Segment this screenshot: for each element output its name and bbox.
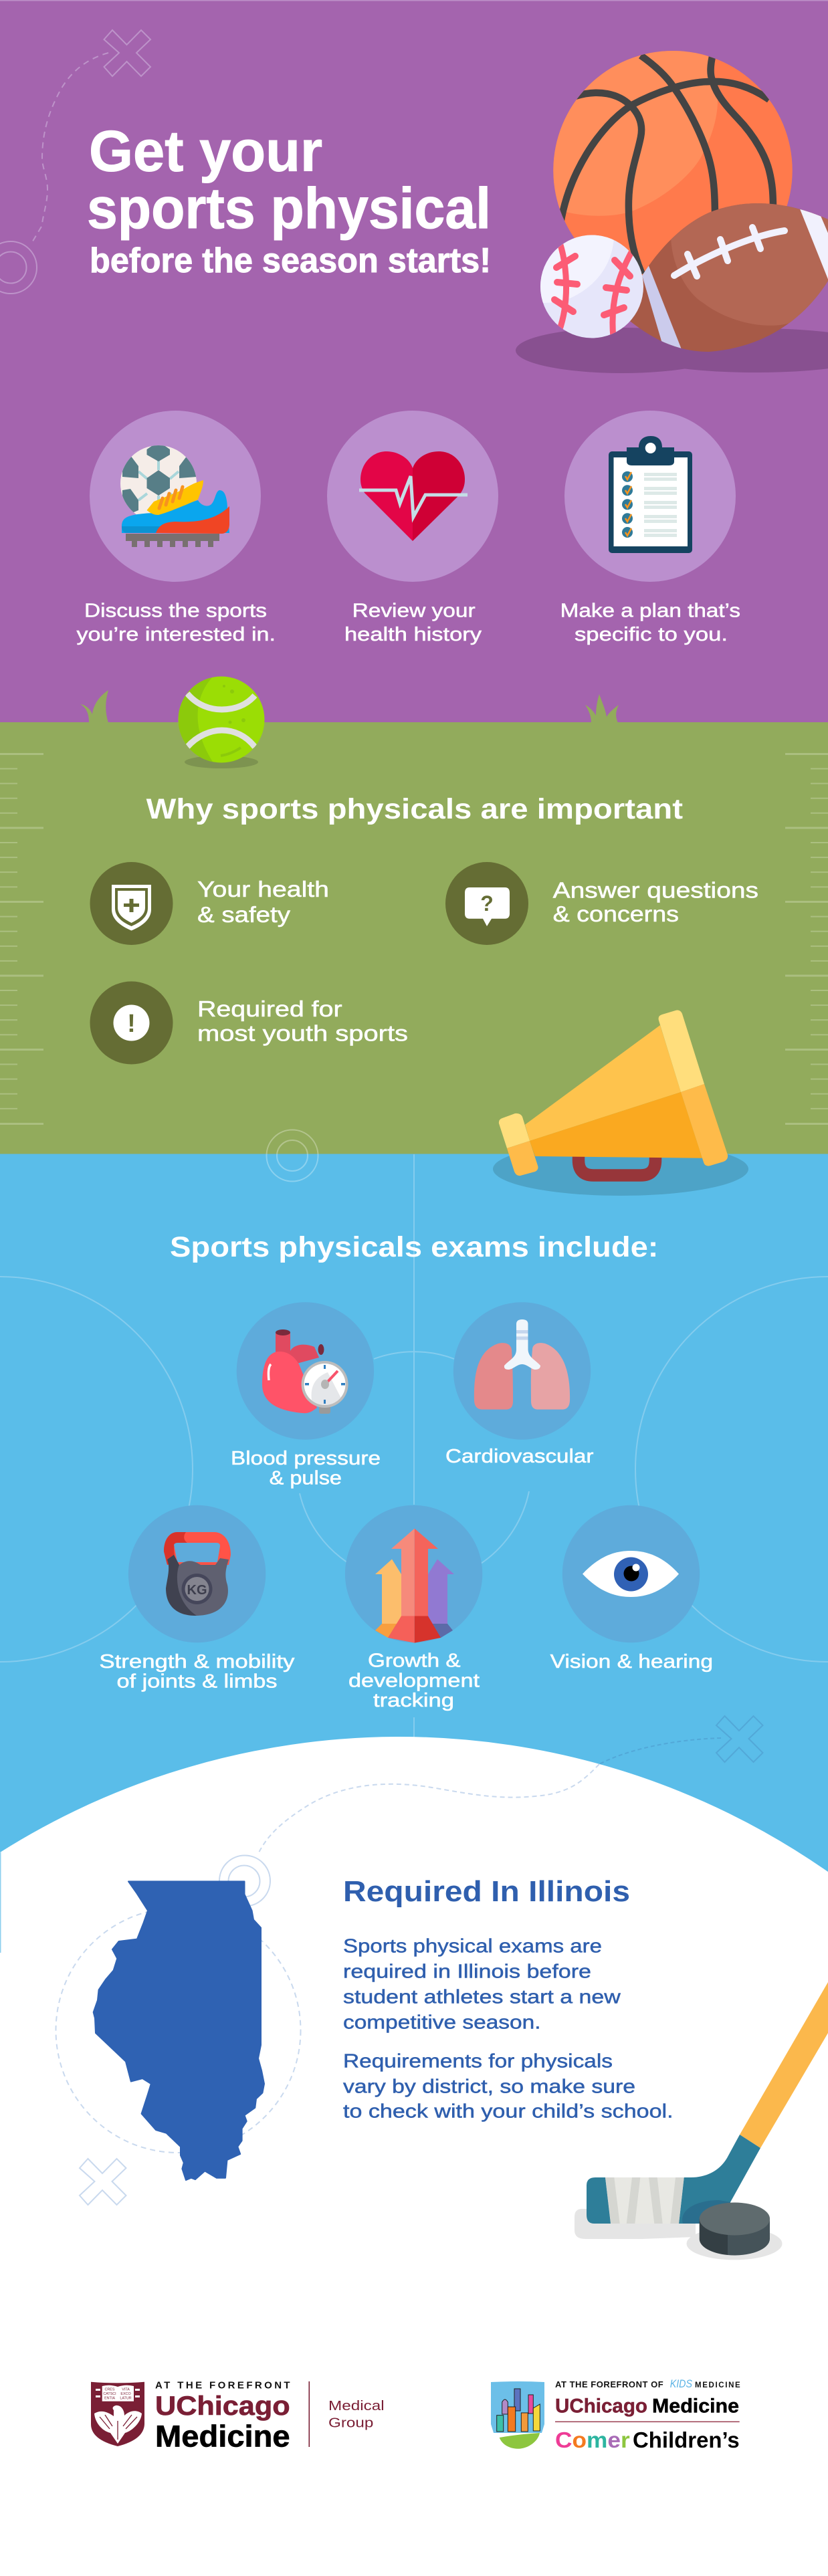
label: Discuss the sports xyxy=(84,601,267,622)
label xyxy=(348,1650,480,1711)
crest: skyline xyxy=(491,2381,544,2449)
label: Answer questions xyxy=(553,877,758,902)
yard lines xyxy=(0,753,828,1125)
label: Cardiovascular xyxy=(445,1446,594,1467)
exam: cardiovascular xyxy=(445,1302,594,1467)
paragraph 2: to check with your child’s school. xyxy=(343,2101,674,2123)
wordmark: Medicine xyxy=(155,2419,290,2453)
label: Required for xyxy=(197,996,342,1021)
wordmark xyxy=(155,2380,290,2453)
exam: growth and development tracking xyxy=(345,1505,482,1711)
label: Review your xyxy=(352,601,476,622)
sub-brand: Medical xyxy=(328,2398,385,2413)
title: sports physical xyxy=(87,177,491,241)
icon: shield xyxy=(112,885,151,931)
icon: grass tufts xyxy=(80,690,619,723)
icon: heart with pulse xyxy=(359,451,468,541)
item: answer questions and concerns xyxy=(445,862,758,945)
baseball xyxy=(538,233,645,340)
panel: white Illinois section xyxy=(0,1737,828,2576)
paragraph 2: Requirements for physicals xyxy=(343,2050,613,2072)
crest: VITA xyxy=(122,2387,130,2391)
icon: eye xyxy=(583,1551,679,1597)
heading: Sports physicals exams include: xyxy=(170,1231,658,1263)
icon: speech bubble with question mark: ? xyxy=(480,891,494,916)
wordmark: Comer xyxy=(555,2428,630,2452)
icon: heart and gauge xyxy=(262,1329,348,1414)
wordmark: UChicago xyxy=(555,2395,647,2417)
label: & safety xyxy=(197,902,291,927)
label xyxy=(99,1651,295,1693)
map: Illinois xyxy=(94,1881,264,2180)
icon: lungs xyxy=(474,1319,570,1410)
crest: EXCO xyxy=(120,2392,131,2396)
icon: soccer ball and cleat xyxy=(120,441,229,547)
panel: purple header xyxy=(0,0,828,722)
paragraph 2 xyxy=(343,2050,674,2123)
text block: required in Illinois xyxy=(343,1875,674,2123)
label: Make a plan that’s xyxy=(560,601,740,622)
wordmark: Children’s xyxy=(633,2428,740,2452)
tagline: KIDS xyxy=(670,2377,693,2390)
label: health history xyxy=(344,624,482,645)
exam: vision and hearing xyxy=(550,1505,713,1673)
icon: exclamation mark xyxy=(114,1004,150,1041)
paragraph 2: vary by district, so make sure xyxy=(343,2076,635,2097)
icon: kettlebell xyxy=(164,1532,231,1616)
court lines xyxy=(0,1154,828,1739)
label xyxy=(197,996,408,1046)
label: Vision & hearing xyxy=(550,1651,713,1673)
icon: growth arrows xyxy=(375,1529,454,1643)
heading: Required In Illinois xyxy=(343,1875,630,1908)
item: required for most youth sports xyxy=(90,982,408,1065)
decorative dashed path, ring and X xyxy=(56,1764,599,2205)
basketball xyxy=(553,51,793,276)
label xyxy=(231,1448,381,1489)
crest xyxy=(91,2382,144,2446)
label: of joints & limbs xyxy=(116,1671,277,1693)
wordmark: Medicine xyxy=(652,2395,739,2417)
decorative X and dashed path on blue xyxy=(599,1716,762,1764)
paragraph 1: student athletes start a new xyxy=(343,1986,621,2008)
label: Your health xyxy=(197,877,329,901)
crest: CRES xyxy=(105,2387,115,2391)
icon: hockey stick and puck xyxy=(575,1982,828,2260)
exam: strength and mobility xyxy=(99,1505,295,1693)
crest: ENTIA xyxy=(104,2397,115,2401)
icon: tennis ball xyxy=(178,675,265,768)
label: specific to you. xyxy=(575,624,728,645)
heading: Why sports physicals are important xyxy=(146,793,683,825)
label: most youth sports xyxy=(197,1021,408,1046)
icon: megaphone xyxy=(493,1010,748,1196)
sub-brand: Group xyxy=(328,2415,373,2430)
title: Get your xyxy=(89,120,322,184)
decorative rings xyxy=(266,1130,318,1181)
label xyxy=(560,601,740,645)
wordmark xyxy=(555,2395,740,2452)
icon: clipboard checklist xyxy=(609,436,692,553)
label: tracking xyxy=(373,1690,454,1711)
logo: UChicago Medicine Medical Group xyxy=(91,2380,385,2453)
tagline: MEDICINE xyxy=(695,2381,740,2389)
step 3: make a plan xyxy=(560,411,740,645)
label: you’re interested in. xyxy=(76,624,276,645)
wordmark: AT THE FOREFRONT xyxy=(155,2380,290,2391)
wordmark: UChicago xyxy=(155,2391,290,2421)
icon: sports balls xyxy=(516,47,828,373)
paragraph 1: Sports physical exams are xyxy=(343,1936,602,1957)
label xyxy=(344,601,482,645)
step 2: review health history xyxy=(327,411,498,645)
sub-brand xyxy=(328,2398,385,2430)
panel: blue court xyxy=(0,1129,828,1872)
title xyxy=(87,120,491,280)
exam: blood pressure and pulse xyxy=(231,1302,381,1489)
logo: UChicago Medicine Comer Children's xyxy=(491,2377,740,2452)
crest: CATSCI xyxy=(103,2392,116,2396)
item: your health and safety xyxy=(90,862,329,945)
icon: speech bubble with question mark xyxy=(465,887,510,926)
label: & pulse xyxy=(270,1468,342,1489)
paragraph 1: competitive season. xyxy=(343,2012,540,2033)
panel: green field xyxy=(0,675,828,1154)
icon: kettlebell: KG xyxy=(187,1583,207,1598)
title: before the season starts! xyxy=(90,241,491,280)
label: Blood pressure xyxy=(231,1448,381,1469)
step 1: discuss the sports xyxy=(76,411,276,645)
decorative play diagram: X and dashed path xyxy=(0,30,150,294)
crest: LATUR xyxy=(120,2397,132,2401)
icon: exclamation mark: ! xyxy=(127,1010,136,1038)
tagline: AT THE FOREFRONT OF xyxy=(555,2379,663,2389)
tagline xyxy=(555,2377,740,2390)
american football xyxy=(630,203,828,352)
label xyxy=(76,601,276,645)
paragraph 1: required in Illinois before xyxy=(343,1961,591,1983)
paragraph 1 xyxy=(343,1936,621,2033)
label: & concerns xyxy=(553,901,679,926)
label xyxy=(553,877,758,926)
label: Growth & xyxy=(368,1650,460,1672)
label: development xyxy=(348,1671,480,1692)
label: Strength & mobility xyxy=(99,1651,295,1673)
label xyxy=(197,877,329,927)
